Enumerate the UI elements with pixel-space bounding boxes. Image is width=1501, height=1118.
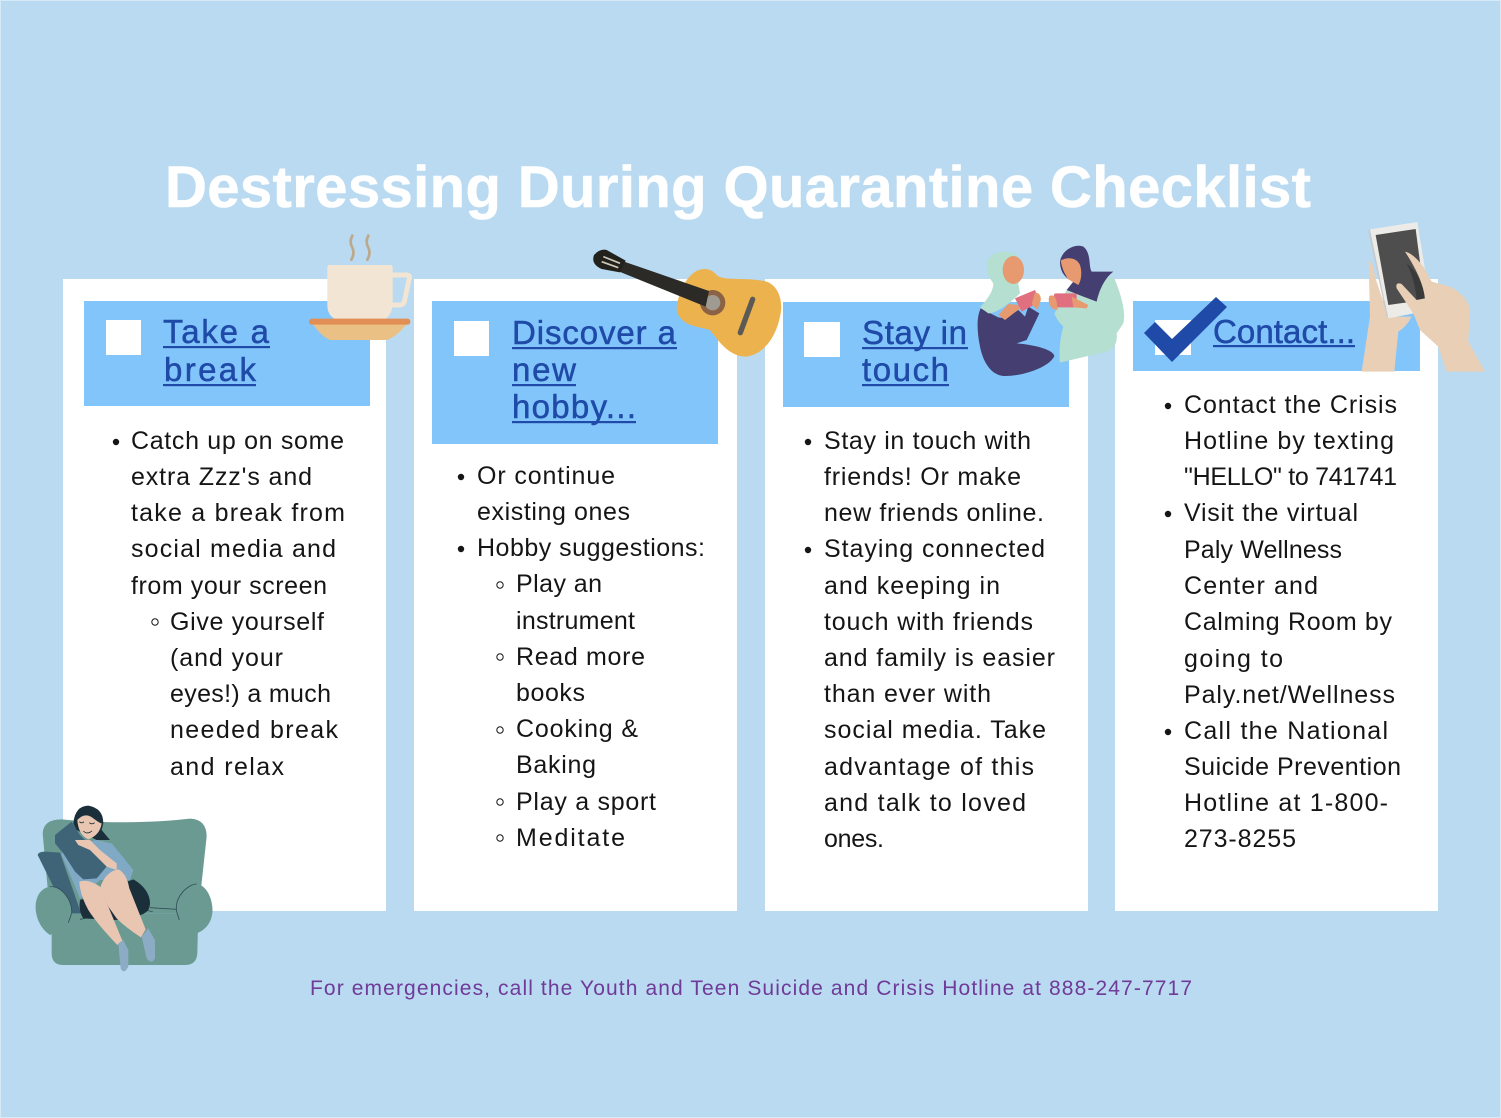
bullet list: contact: "HELLO" to 741741 — [1184, 463, 1397, 491]
bullet list: contact: Suicide Prevention — [1184, 753, 1401, 781]
bullet list: take a break: and relax — [170, 753, 284, 781]
bullet list: discover a new hobby: Baking — [516, 751, 596, 779]
heading: take a break: break — [164, 351, 256, 388]
panel: discover a new hobby — [414, 279, 737, 911]
bullet list: discover a new hobby: Read more — [516, 643, 645, 671]
bullet list: stay in touch — [805, 427, 1055, 853]
bullet list: contact: Center and — [1184, 572, 1318, 600]
panel: contact — [1115, 279, 1438, 911]
header bar: contact — [1133, 301, 1420, 371]
bullet list: discover a new hobby: Hobby suggestions: — [477, 534, 705, 562]
bullet list: discover a new hobby: Play an — [516, 570, 602, 598]
bullet list: contact: 273-8255 — [1184, 825, 1296, 853]
heading: discover a new hobby: hobby... — [512, 388, 636, 425]
icon: guitar — [593, 250, 781, 357]
bullet list: contact — [1165, 391, 1401, 853]
bullet list: contact: going to — [1184, 645, 1283, 673]
bullet list: take a break: take a break from — [131, 499, 345, 527]
bullet list: stay in touch: friends! Or make — [824, 463, 1021, 491]
bullet list: stay in touch: than ever with — [824, 680, 991, 708]
heading: contact: Contact... — [1213, 313, 1355, 350]
bullet list: discover a new hobby — [458, 462, 705, 852]
bullet list: take a break: from your screen — [131, 572, 327, 600]
bullet list: take a break: social media and — [131, 535, 336, 563]
title: Destressing During Quarantine Checklist — [165, 155, 1311, 220]
icon: coffee cup — [309, 236, 410, 340]
icon: hands holding phone — [1362, 222, 1485, 372]
bullet list: contact: Call the National — [1184, 717, 1388, 745]
heading: stay in touch: touch — [862, 351, 949, 388]
bullet list: contact: Hotline by texting — [1184, 427, 1394, 455]
panel: stay in touch — [765, 279, 1088, 911]
bullet list: discover a new hobby: Cooking & — [516, 715, 638, 743]
checkbox: contact — [1155, 320, 1191, 355]
bullet list: stay in touch: social media. Take — [824, 716, 1046, 744]
bullet list: contact: Paly.net/Wellness — [1184, 681, 1395, 709]
icon: two friends with game consoles — [978, 246, 1124, 376]
icon: check mark — [1144, 297, 1227, 362]
heading: stay in touch — [862, 314, 968, 388]
bullet list: stay in touch: and talk to loved — [824, 789, 1026, 817]
bullet list: discover a new hobby: instrument — [516, 607, 635, 635]
panel: take a break — [63, 279, 386, 911]
bullet list: contact: Calming Room by — [1184, 608, 1392, 636]
bullet list: discover a new hobby: existing ones — [477, 498, 630, 526]
bullet list: take a break: extra Zzz's and — [131, 463, 312, 491]
bullet list: take a break: (and your — [170, 644, 283, 672]
bullet list: discover a new hobby: Meditate — [516, 824, 625, 852]
header bar: discover a new hobby — [432, 301, 718, 444]
checkbox: discover a new hobby — [454, 321, 489, 356]
checkbox: take a break — [106, 320, 141, 355]
checkbox: stay in touch — [804, 322, 840, 357]
bullet list: discover a new hobby: books — [516, 679, 585, 707]
header bar: take a break — [84, 301, 370, 406]
footer: emergency hotline: For emergencies, call the Youth and Teen Suicide and Crisis Hotline at 888-247-7717 — [310, 977, 1192, 1000]
bullet list: take a break: Catch up on some — [131, 427, 344, 455]
heading: take a break: Take a — [163, 313, 270, 350]
heading: take a break — [163, 313, 270, 388]
bullet list: stay in touch: ones. — [824, 825, 884, 853]
icon: woman resting on armchair — [36, 806, 213, 971]
bullet list: contact: Hotline at 1-800- — [1184, 789, 1388, 817]
heading: discover a new hobby: Discover a — [512, 314, 677, 351]
bullet list: take a break: eyes!) a much — [170, 680, 331, 708]
bullet list: take a break: Give yourself — [170, 608, 324, 636]
bullet list: stay in touch: advantage of this — [824, 753, 1034, 781]
bullet list: contact: Contact the Crisis — [1184, 391, 1397, 419]
bullet list: stay in touch: Staying connected — [824, 535, 1045, 563]
bullet list: stay in touch: Stay in touch with — [824, 427, 1031, 455]
bullet list: contact: Paly Wellness — [1184, 536, 1342, 564]
bullet list: stay in touch: and family is easier — [824, 644, 1055, 672]
bullet list: discover a new hobby: Or continue — [477, 462, 615, 490]
bullet list: stay in touch: new friends online. — [824, 499, 1044, 527]
bullet list: discover a new hobby: Play a sport — [516, 788, 656, 816]
bullet list: stay in touch: touch with friends — [824, 608, 1033, 636]
heading: discover a new hobby: new — [512, 351, 576, 388]
bullet list: take a break — [113, 427, 345, 781]
bullet list: contact: Visit the virtual — [1184, 499, 1358, 527]
heading: stay in touch: Stay in — [862, 314, 967, 351]
header bar: stay in touch — [783, 302, 1069, 407]
bullet list: take a break: needed break — [170, 716, 338, 744]
bullet list: stay in touch: and keeping in — [824, 572, 1000, 600]
heading: discover a new hobby — [512, 314, 677, 425]
